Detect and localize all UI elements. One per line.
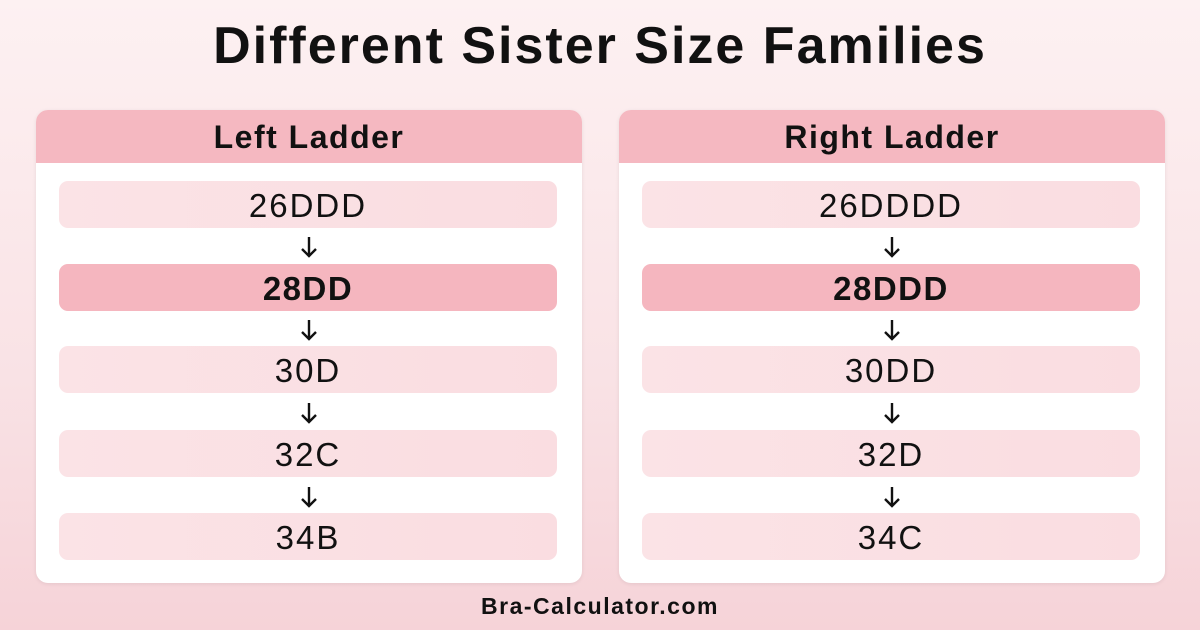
arrow xyxy=(884,403,900,424)
row 26DDD: 26DDD xyxy=(249,187,367,224)
arrow xyxy=(884,237,900,258)
row 30D xyxy=(59,346,557,393)
row 28DDD highlighted xyxy=(642,264,1140,311)
row 32C: 32C xyxy=(275,436,341,473)
row 34B xyxy=(59,513,557,560)
row 28DD highlighted xyxy=(59,264,557,311)
panel: left ladder xyxy=(36,110,582,583)
row 32D: 32D xyxy=(858,436,924,473)
arrow xyxy=(301,403,317,424)
heading: right ladder xyxy=(619,110,1165,163)
heading: right ladder: Right Ladder xyxy=(784,119,1000,155)
panel: right ladder xyxy=(619,110,1165,583)
row 26DDD xyxy=(59,181,557,228)
row 34C: 34C xyxy=(858,519,924,556)
row 28DDD highlighted: 28DDD xyxy=(833,270,949,307)
row 28DD highlighted: 28DD xyxy=(263,270,353,307)
arrow xyxy=(301,487,317,508)
arrow xyxy=(884,320,900,341)
row 26DDDD: 26DDDD xyxy=(819,187,963,224)
row 34C xyxy=(642,513,1140,560)
row 30D: 30D xyxy=(275,352,341,389)
title: Different Sister Size Families xyxy=(213,17,987,75)
arrow xyxy=(301,237,317,258)
heading: left ladder: Left Ladder xyxy=(214,119,404,155)
arrow xyxy=(301,320,317,341)
heading: left ladder xyxy=(36,110,582,163)
row 30DD: 30DD xyxy=(845,352,937,389)
footer: Bra-Calculator.com xyxy=(481,593,719,619)
row 32C xyxy=(59,430,557,477)
row 30DD xyxy=(642,346,1140,393)
row 34B: 34B xyxy=(276,519,340,556)
row 26DDDD xyxy=(642,181,1140,228)
arrow xyxy=(884,487,900,508)
row 32D xyxy=(642,430,1140,477)
